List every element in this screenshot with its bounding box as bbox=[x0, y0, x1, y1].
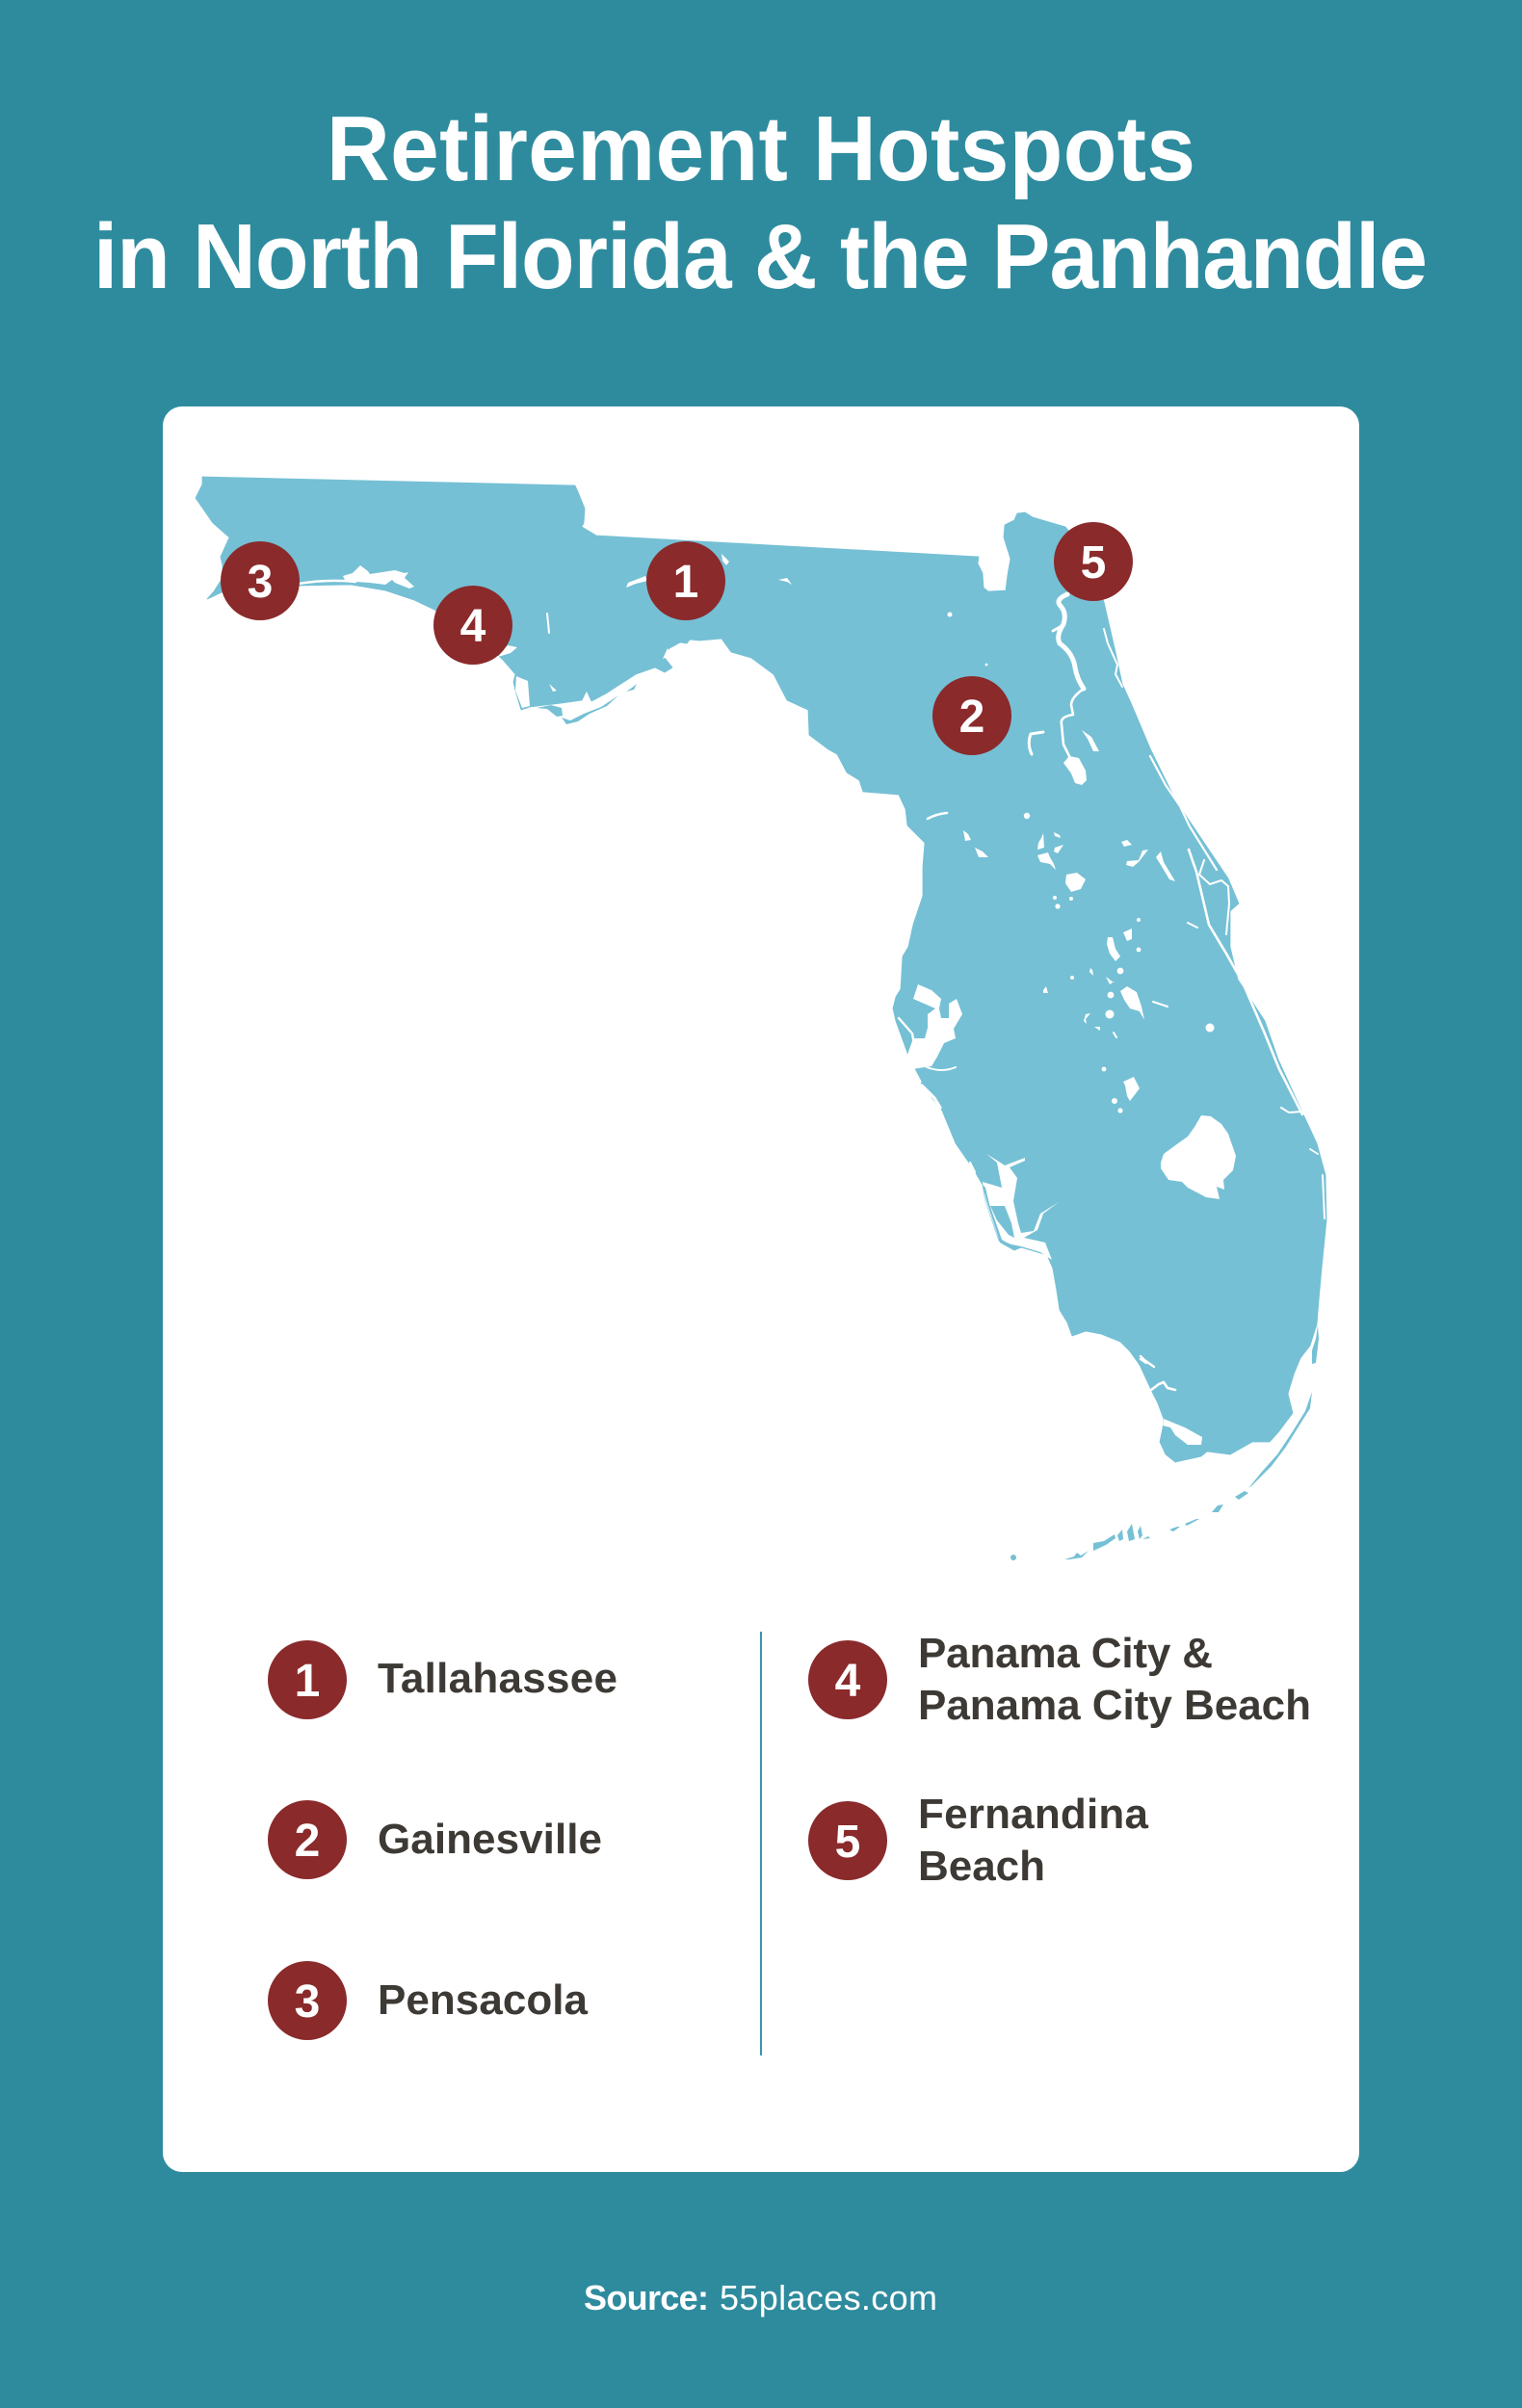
legend item 1: 1 bbox=[295, 1656, 320, 1707]
marker 4: 4 bbox=[460, 601, 486, 652]
legend item 1 bbox=[268, 1640, 617, 1719]
legend bbox=[268, 1630, 1311, 2055]
legend divider bbox=[760, 1632, 762, 2055]
Lake George bbox=[1063, 756, 1087, 785]
legend item 5 bbox=[808, 1791, 1149, 1890]
legend item 2: 2 bbox=[295, 1816, 320, 1867]
marker 3 bbox=[221, 541, 300, 620]
marker 3: 3 bbox=[248, 557, 273, 608]
panel: white card bbox=[163, 406, 1359, 2172]
legend item 4: Panama City & bbox=[918, 1630, 1213, 1677]
map: Florida bbox=[196, 477, 1326, 1560]
Apalachee shore inlets bbox=[626, 576, 647, 588]
legend item 5: Fernandina bbox=[918, 1791, 1149, 1838]
title bbox=[93, 96, 1428, 308]
Lake Okeechobee bbox=[1161, 1115, 1236, 1199]
Charlotte Harbor bbox=[983, 1154, 1059, 1260]
Tampa Bay bbox=[907, 984, 962, 1069]
legend item 5: Beach bbox=[918, 1843, 1045, 1890]
legend item 1: Tallahassee bbox=[378, 1655, 617, 1702]
marker 4 bbox=[433, 586, 512, 665]
Cape Sable bay detail bbox=[1163, 1419, 1202, 1445]
land mass bbox=[196, 477, 1326, 1462]
legend item 2 bbox=[268, 1800, 602, 1879]
St Joseph Bay bbox=[515, 676, 530, 708]
bays and lakes bbox=[343, 554, 1236, 1260]
source: Source: bbox=[584, 2278, 709, 2317]
marker 2 bbox=[932, 676, 1011, 755]
marker 1: 1 bbox=[673, 557, 698, 608]
legend item 3: Pensacola bbox=[378, 1976, 589, 2024]
legend item 4 bbox=[808, 1630, 1311, 1729]
barrier islands and keys bbox=[537, 684, 1319, 1560]
marker 5: 5 bbox=[1081, 537, 1106, 589]
Charlotte Harbor barrier strip and Pine Island bbox=[983, 1185, 1021, 1250]
legend item 5: 5 bbox=[835, 1817, 860, 1868]
legend item 4: 4 bbox=[835, 1656, 861, 1707]
legend item 3: 3 bbox=[295, 1976, 320, 2028]
rivers and lagoons bbox=[299, 581, 1325, 1390]
source bbox=[584, 2278, 937, 2317]
title: Retirement Hotspots bbox=[327, 96, 1195, 200]
source: 55places.com bbox=[720, 2278, 937, 2317]
legend item 3 bbox=[268, 1961, 589, 2040]
legend item 4: Panama City Beach bbox=[918, 1682, 1311, 1729]
Crescent Lake bbox=[1082, 730, 1099, 751]
Choctawhatchee Bay bbox=[343, 565, 414, 589]
marker 2: 2 bbox=[959, 692, 984, 743]
legend item 2: Gainesville bbox=[378, 1816, 602, 1863]
central lakes bbox=[1037, 833, 1044, 850]
marker 1 bbox=[646, 541, 725, 620]
title: in North Florida & the Panhandle bbox=[93, 204, 1428, 308]
marker 5 bbox=[1054, 522, 1133, 601]
